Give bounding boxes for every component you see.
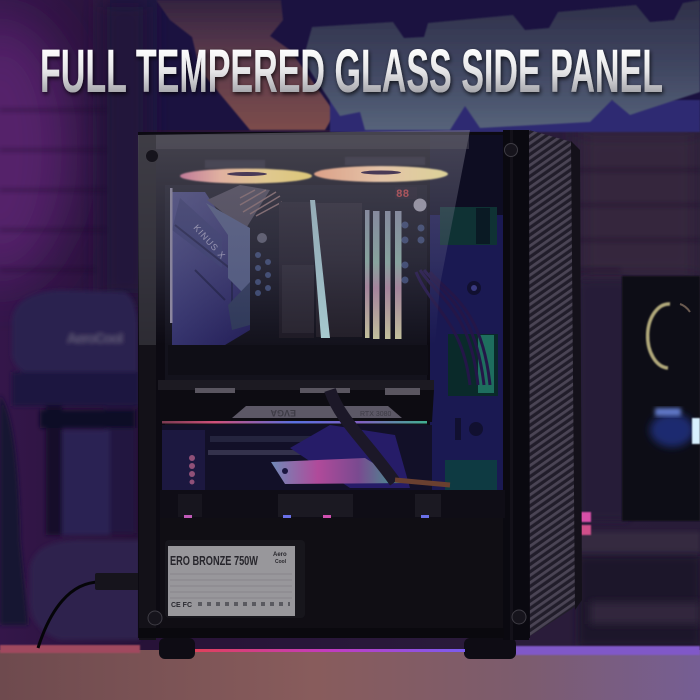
shelf and pink lights on the right	[578, 512, 700, 646]
cpu cooler	[279, 200, 362, 338]
background: slate hexagon wall lights	[303, 0, 700, 130]
debug led readout: 88	[396, 189, 410, 201]
background: purple gap below hexagons	[330, 100, 700, 132]
psu label: CE FC	[171, 602, 192, 609]
cable management tray	[430, 130, 529, 640]
capacitor dots	[255, 198, 426, 296]
power cable	[38, 573, 140, 648]
psu label: Cool	[275, 559, 287, 565]
wiring	[416, 270, 490, 385]
psu label: ERO BRONZE 750W	[170, 554, 258, 568]
ram sticks	[365, 210, 402, 339]
psu window	[165, 540, 305, 618]
monitor on the right	[622, 276, 700, 521]
motherboard	[165, 185, 428, 520]
psu label: Aero	[273, 552, 287, 558]
under-case led strip	[195, 649, 465, 652]
glass reflection sheen	[138, 130, 470, 345]
table top	[0, 645, 700, 700]
case body	[138, 132, 530, 638]
bottom fans and cables	[160, 490, 505, 518]
vrm heatsink: KINUS X	[192, 223, 227, 261]
gaming chair: AeroCool	[67, 330, 123, 346]
front panel: carbon fibre	[529, 130, 582, 636]
gaming chair	[0, 290, 140, 640]
debug led readout	[395, 187, 417, 201]
graphics card	[158, 380, 434, 424]
lower motherboard	[162, 390, 450, 490]
case feet	[159, 638, 516, 659]
graphics card: RTX 3080	[360, 411, 391, 418]
top heatsink stripes	[240, 190, 282, 216]
pc case	[138, 130, 582, 659]
graphics card: EVGA	[270, 408, 296, 418]
vrm heatsink	[170, 185, 270, 345]
background: orange hexagon wall light	[156, 0, 335, 130]
psu shroud	[160, 518, 503, 628]
case screws	[146, 144, 526, 625]
psu label	[168, 546, 295, 616]
glass panel frame	[139, 135, 504, 640]
background: brick wall courses	[0, 110, 700, 270]
aio fans	[180, 157, 448, 184]
